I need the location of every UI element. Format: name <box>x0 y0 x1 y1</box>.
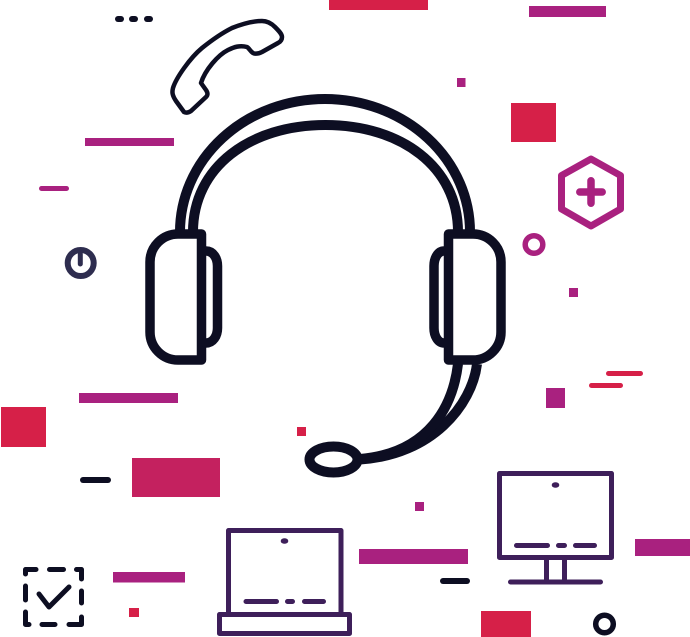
icon: telephone handset <box>172 21 282 113</box>
icon: three dots <box>115 16 153 22</box>
microphone boom <box>360 364 477 460</box>
icon: medical hexagon plus <box>562 159 620 226</box>
dark dashes <box>80 477 470 584</box>
icon: power button <box>68 250 94 276</box>
microphone tip <box>310 446 358 472</box>
icon: dark ring <box>596 615 613 633</box>
left ear cup <box>150 234 218 360</box>
icon: headset <box>150 99 501 472</box>
icon: desktop monitor <box>500 474 612 582</box>
crimson block <box>132 458 220 497</box>
icon: dashed checkbox <box>26 570 82 624</box>
headband <box>180 99 470 232</box>
icon: magenta ring <box>525 236 543 253</box>
icon: laptop <box>220 530 350 634</box>
right ear cup <box>434 234 501 360</box>
